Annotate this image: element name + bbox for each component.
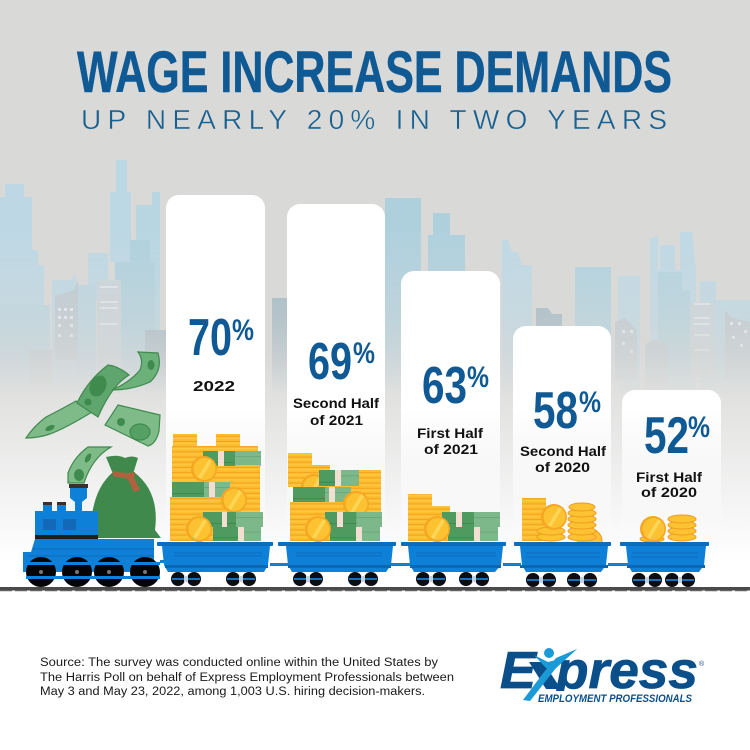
stat: 69% second half of 2021: of 2021	[310, 412, 363, 428]
stat: 52% first half of 2020: %	[688, 411, 710, 444]
stat: 52% first half of 2020: of 2020	[641, 484, 697, 500]
column: first half of 2020	[622, 390, 721, 545]
logo: Express: press	[554, 642, 698, 700]
stat: 52% first half of 2020	[636, 407, 710, 500]
locomotive	[23, 484, 170, 587]
source note: Source: The survey was conducted online within the United States by	[40, 657, 438, 669]
icon: X figure	[523, 648, 577, 701]
cargo: second half 2020 pile	[522, 498, 602, 553]
icon: money bag	[91, 456, 161, 538]
cargo: 2022 pile	[170, 434, 263, 542]
stat: 63% first half of 2021: %	[467, 361, 489, 394]
city skyline	[0, 160, 750, 400]
logo: Express: EMPLOYMENT PROFESSIONALS	[538, 693, 693, 705]
logo: Express: E	[500, 642, 537, 700]
icon: chimney	[70, 488, 87, 511]
wagon 5	[608, 542, 709, 587]
stat: 69% second half of 2021: %	[353, 337, 375, 370]
stat: 52% first half of 2020: 52	[644, 407, 689, 465]
stat: 63% first half of 2021	[417, 357, 489, 457]
wagon 2	[270, 542, 396, 586]
stat: 58% second half of 2020: 58	[533, 382, 578, 440]
source note: May 3 and May 23, 2022, among 1,003 U.S. hiring decision-makers.	[40, 686, 425, 698]
stat: 70% 2022: 2022	[193, 378, 235, 395]
column: second half of 2020	[513, 326, 611, 545]
wagon 1	[157, 542, 273, 586]
stat: 70% 2022: %	[232, 314, 254, 347]
stat: 52% first half of 2020: First Half	[636, 469, 702, 485]
stat: 69% second half of 2021: 69	[308, 333, 352, 391]
stat: 70% 2022: 70	[188, 309, 232, 367]
logo: Express	[500, 648, 704, 702]
icon: flying money	[26, 352, 160, 483]
cargo: first half 2020 pile	[640, 515, 696, 542]
column: first half of 2021	[401, 271, 500, 545]
stat: 58% second half of 2020: of 2020	[535, 459, 590, 475]
stat: 58% second half of 2020: Second Half	[520, 443, 606, 459]
column: 2022	[166, 195, 265, 545]
wagon 3	[391, 542, 506, 586]
cargo: second half 2021 pile	[288, 453, 382, 542]
source note	[40, 657, 454, 698]
subtitle: UP NEARLY 20% IN TWO YEARS	[81, 104, 667, 135]
stat: 63% first half of 2021: 63	[422, 357, 467, 415]
stat: 69% second half of 2021: Second Half	[293, 395, 379, 411]
cargo: first half 2021 pile	[408, 494, 500, 542]
stat: 63% first half of 2021: of 2021	[424, 441, 478, 457]
stat: 58% second half of 2020	[520, 382, 606, 475]
stat: 69% second half of 2021	[293, 333, 379, 428]
logo: Express: ®	[699, 660, 705, 668]
wagon 4	[503, 542, 611, 587]
stat: 58% second half of 2020: %	[579, 386, 601, 419]
stat: 70% 2022	[188, 309, 254, 395]
source note: The Harris Poll on behalf of Express Employment Professionals between	[40, 672, 454, 684]
column: second half of 2021	[287, 204, 385, 545]
track	[0, 587, 750, 591]
stat: 63% first half of 2021: First Half	[417, 425, 483, 441]
